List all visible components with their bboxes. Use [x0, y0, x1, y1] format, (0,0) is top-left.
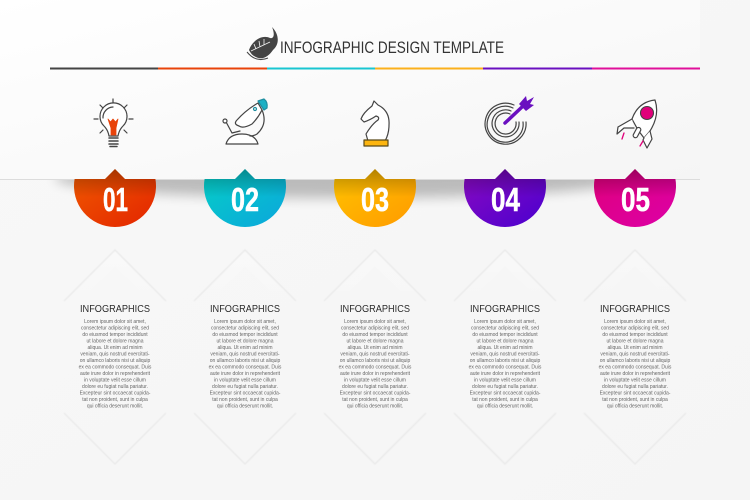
panel: step 1 text: veniam, quis nostrud exercitati-	[80, 352, 150, 358]
panel: step 2 text: on ullamco laboris nisi ut aliquip	[210, 358, 281, 364]
badge 05	[594, 169, 676, 227]
panel: step 3 text: on ullamco laboris nisi ut aliquip	[340, 358, 411, 364]
panel: step 5 text: Excepteur sint occaecat cupida-	[600, 390, 671, 396]
badge 02	[204, 169, 286, 227]
panel: step 4 text: Lorem ipsum dolor sit amet,	[474, 319, 536, 325]
badge 01	[74, 169, 156, 227]
panel: step 2 text: Lorem ipsum dolor sit amet,	[214, 319, 276, 325]
panel: step 5 text: aliqua. Ut enim ad minim	[607, 345, 663, 351]
panel: step 3 text: INFOGRAPHICS	[340, 303, 410, 315]
panel: step 3 text: Lorem ipsum dolor sit amet,	[344, 319, 406, 325]
panel: step 3 text: ex ea commodo consequat. Duis	[339, 364, 412, 370]
badge 04: 04	[491, 181, 521, 218]
panel: step 5 text: in voluptate velit esse cillum	[604, 378, 666, 384]
panel: step 3 text: consectetur adipiscing elit, sed	[341, 326, 409, 332]
panel: step 4 text: Excepteur sint occaecat cupida-	[470, 390, 541, 396]
panel: step 4 text: do eiusmod tempor incididunt	[472, 332, 538, 338]
panel: step 5 text	[584, 250, 686, 464]
panel: step 2 text: qui officia deserunt mollit.	[217, 404, 273, 410]
panel: step 5 text: dolore eu fugiat nulla pariatur.	[602, 384, 668, 390]
panel: step 1 text: consectetur adipiscing elit, sed	[81, 326, 149, 332]
title	[247, 27, 504, 60]
panel: step 5 text: veniam, quis nostrud exercitati-	[600, 352, 670, 358]
panel: step 2 text: Excepteur sint occaecat cupida-	[210, 390, 281, 396]
panel: step 3 text: aliqua. Ut enim ad minim	[347, 345, 403, 351]
panel: step 5 text: aute irure dolor in reprehenderit	[600, 371, 671, 377]
panel: step 2 text: aute irure dolor in reprehenderit	[210, 371, 281, 377]
panel: step 4 text: in voluptate velit esse cillum	[474, 378, 536, 384]
panel: step 1 text: aute irure dolor in reprehenderit	[80, 371, 151, 377]
colour rule	[50, 68, 700, 70]
panel: step 1 text: Excepteur sint occaecat cupida-	[80, 390, 151, 396]
panel: step 3 text: in voluptate velit esse cillum	[344, 378, 406, 384]
icon: rocket	[617, 100, 657, 148]
badge 01: 01	[103, 181, 128, 218]
panel: step 3 text: tat non proident, sunt in culpa	[342, 397, 408, 403]
panel: step 2 text: do eiusmod tempor incididunt	[212, 332, 278, 338]
panel: step 1 text: dolore eu fugiat nulla pariatur.	[82, 384, 148, 390]
badge 05: 05	[621, 181, 650, 218]
panel: step 4 text: ex ea commodo consequat. Duis	[469, 364, 542, 370]
panel: step 4 text: consectetur adipiscing elit, sed	[471, 326, 539, 332]
panel: step 4 text	[454, 250, 556, 464]
heading text: INFOGRAPHIC DESIGN TEMPLATE	[280, 38, 504, 57]
panel: step 5 text: do eiusmod tempor incididunt	[602, 332, 668, 338]
icon: microscope	[223, 99, 267, 144]
panel: step 3 text: qui officia deserunt mollit.	[347, 404, 403, 410]
panel: step 1 text: INFOGRAPHICS	[80, 303, 150, 315]
panel: step 1 text: in voluptate velit esse cillum	[84, 378, 146, 384]
panel: step 1 text	[64, 250, 166, 464]
panel: step 4 text: aute irure dolor in reprehenderit	[470, 371, 541, 377]
panel: step 5 text: ut labore et dolore magna	[607, 338, 664, 344]
badge 03	[334, 169, 416, 227]
panel: step 3 text: do eiusmod tempor incididunt	[342, 332, 408, 338]
icon: logo leaf	[247, 27, 278, 60]
panel: step 4 text: INFOGRAPHICS	[470, 303, 540, 315]
panel: step 3 text: aute irure dolor in reprehenderit	[340, 371, 411, 377]
panel: step 2 text: consectetur adipiscing elit, sed	[211, 326, 279, 332]
panel: step 5 text: Lorem ipsum dolor sit amet,	[604, 319, 666, 325]
panel: step 1 text: ut labore et dolore magna	[87, 338, 144, 344]
panel: step 5 text: tat non proident, sunt in culpa	[602, 397, 668, 403]
panel: step 1 text: ex ea commodo consequat. Duis	[79, 364, 152, 370]
panel: step 2 text: veniam, quis nostrud exercitati-	[210, 352, 280, 358]
panel: step 2 text: ex ea commodo consequat. Duis	[209, 364, 282, 370]
panel: step 3 text	[324, 250, 426, 464]
paper banner	[0, 0, 700, 180]
icon: chess knight	[361, 101, 389, 146]
panel: step 2 text: ut labore et dolore magna	[217, 338, 274, 344]
badge 04	[464, 169, 546, 227]
panel: step 5 text: on ullamco laboris nisi ut aliquip	[600, 358, 671, 364]
panel: step 2 text: in voluptate velit esse cillum	[214, 378, 276, 384]
panel: step 5 text: INFOGRAPHICS	[600, 303, 670, 315]
panel: step 3 text: Excepteur sint occaecat cupida-	[340, 390, 411, 396]
panel: step 4 text: ut labore et dolore magna	[477, 338, 534, 344]
panel: step 1 text: Lorem ipsum dolor sit amet,	[84, 319, 146, 325]
panel: step 4 text: aliqua. Ut enim ad minim	[477, 345, 533, 351]
panel: step 4 text: qui officia deserunt mollit.	[477, 404, 533, 410]
badge 02: 02	[231, 181, 259, 218]
panel: step 5 text: consectetur adipiscing elit, sed	[601, 326, 669, 332]
panel: step 4 text: veniam, quis nostrud exercitati-	[470, 352, 540, 358]
panel: step 4 text: dolore eu fugiat nulla pariatur.	[472, 384, 538, 390]
panel: step 2 text: aliqua. Ut enim ad minim	[217, 345, 273, 351]
panel: step 5 text: qui officia deserunt mollit.	[607, 404, 663, 410]
icon: light bulb	[94, 99, 133, 146]
panel: step 3 text: veniam, quis nostrud exercitati-	[340, 352, 410, 358]
panel: step 1 text: aliqua. Ut enim ad minim	[87, 345, 143, 351]
panel: step 1 text: qui officia deserunt mollit.	[87, 404, 143, 410]
panel: step 2 text: tat non proident, sunt in culpa	[212, 397, 278, 403]
panel: step 1 text: tat non proident, sunt in culpa	[82, 397, 148, 403]
paper banner shadow	[55, 158, 635, 198]
icon: target with dart	[485, 96, 534, 144]
panel: step 2 text: INFOGRAPHICS	[210, 303, 280, 315]
panel: step 4 text: on ullamco laboris nisi ut aliquip	[470, 358, 541, 364]
panel: step 2 text: dolore eu fugiat nulla pariatur.	[212, 384, 278, 390]
panel: step 1 text: on ullamco laboris nisi ut aliquip	[80, 358, 151, 364]
panel: step 3 text: ut labore et dolore magna	[347, 338, 404, 344]
panel: step 3 text: dolore eu fugiat nulla pariatur.	[342, 384, 408, 390]
panel: step 4 text: tat non proident, sunt in culpa	[472, 397, 538, 403]
panel: step 2 text	[194, 250, 296, 464]
panel: step 1 text: do eiusmod tempor incididunt	[82, 332, 148, 338]
badge 03: 03	[361, 181, 389, 218]
panel: step 5 text: ex ea commodo consequat. Duis	[599, 364, 672, 370]
